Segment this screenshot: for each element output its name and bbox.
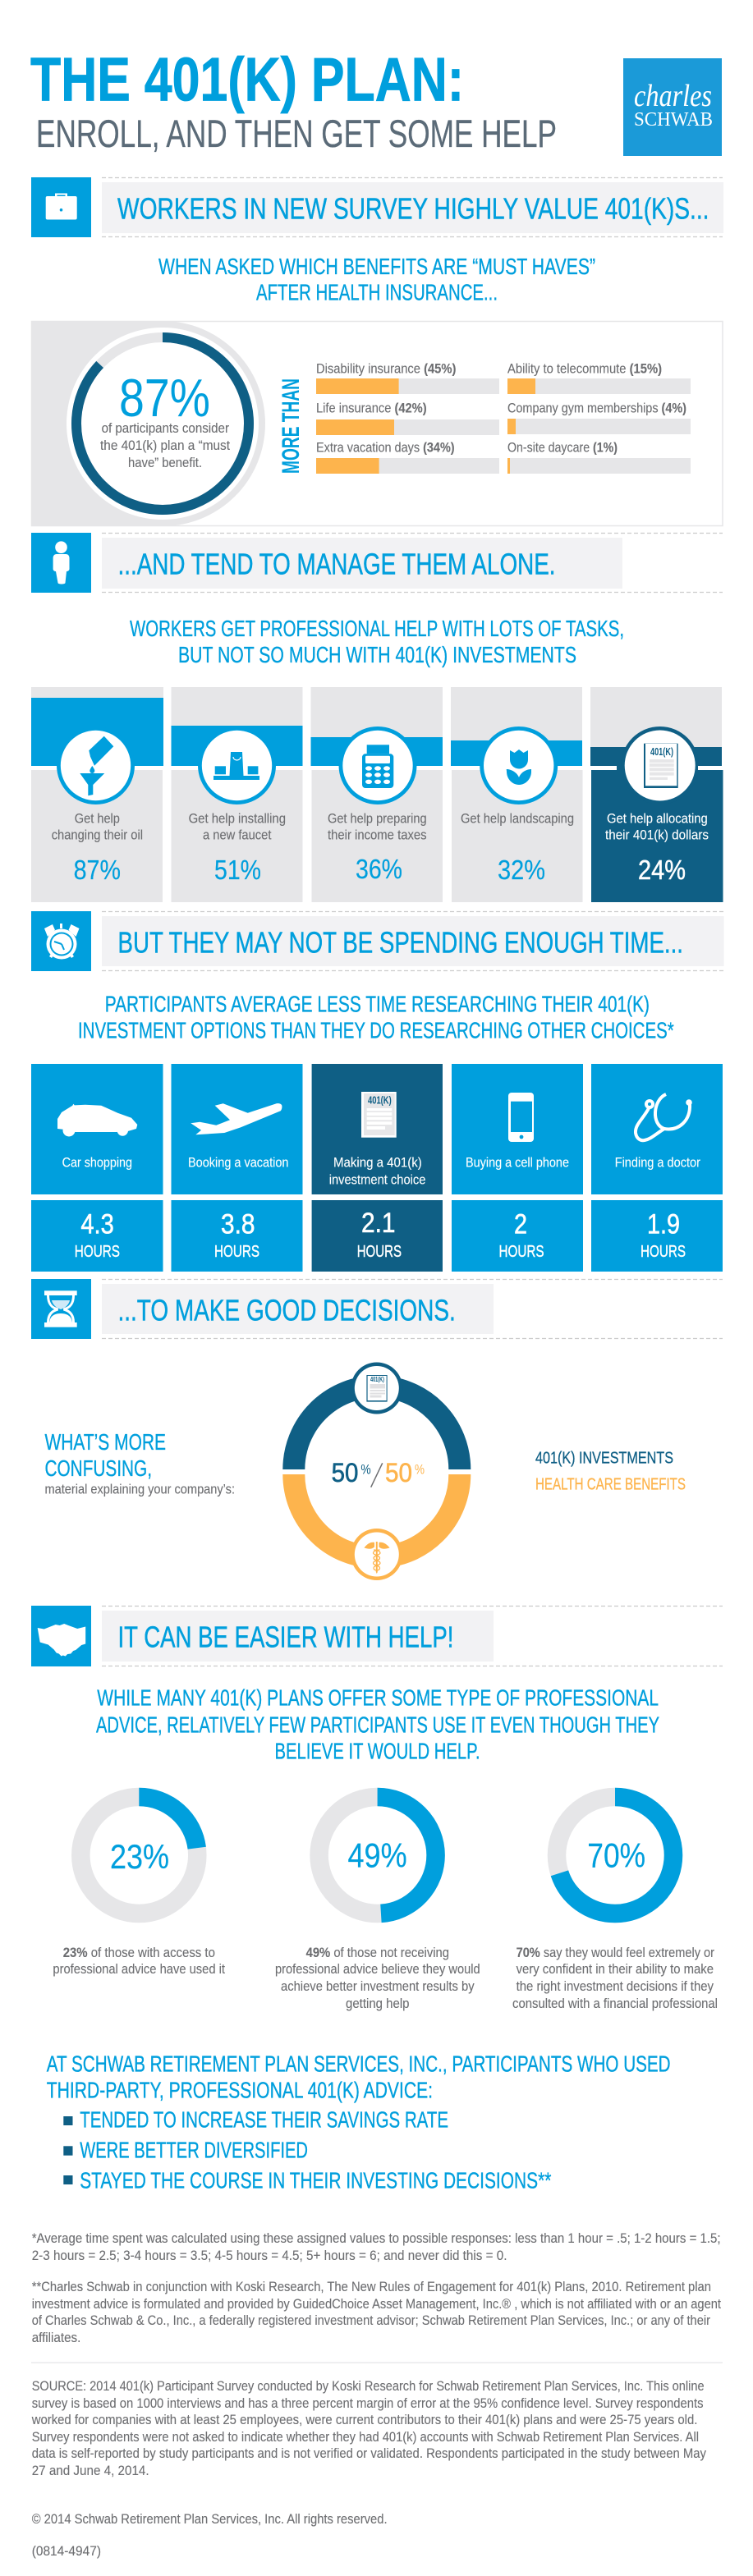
text: what's more confusing: material explaining your company’s: <box>44 1483 235 1497</box>
label: 50% / 50%: 50 <box>332 1458 358 1487</box>
heading: professional help <box>130 616 624 667</box>
panel: finding a doctor <box>591 1064 723 1272</box>
bar: extra vacation days: Extra vacation days (34%) <box>316 441 455 456</box>
section header: not enough time <box>31 911 724 971</box>
text: what's more confusing: WHAT’S MORE <box>44 1429 166 1455</box>
icon: 401(k) document <box>361 1092 397 1138</box>
icon: caduceus badge <box>351 1529 402 1580</box>
label: 50% / 50%: % <box>360 1462 371 1478</box>
donut chart: 49%: 49% <box>348 1836 407 1874</box>
text: copyright: © 2014 Schwab Retirement Plan Services, Inc. All rights reserved. <box>32 2512 388 2527</box>
footnote: Koski research: affiliates. <box>32 2331 80 2345</box>
logo: Charles Schwab: SCHWAB <box>634 109 713 131</box>
panel: oil change card: 87% <box>74 855 121 885</box>
legend: 401(K) INVESTMENTS <box>535 1450 673 1468</box>
text: 70% caption: very confident in their ability to make <box>517 1962 714 1977</box>
icon: 401(k) document <box>644 744 678 788</box>
donut chart: 50/50 <box>294 1363 460 1580</box>
subtitle: ENROLL, AND THEN GET SOME HELP <box>36 112 557 155</box>
bullet: savings rate: TENDED TO INCREASE THEIR SAVINGS RATE <box>80 2107 448 2133</box>
bar: telecommute: Ability to telecommute (15%) <box>507 362 662 377</box>
text: document code: (0814-4947) <box>32 2544 101 2559</box>
icon: alarm clock <box>44 924 79 959</box>
icon: hourglass <box>44 1290 77 1327</box>
section header: workers value 401(k)s <box>31 177 723 237</box>
heading: researching choices <box>78 992 674 1043</box>
icon: briefcase <box>46 194 77 220</box>
panel: finding a doctor: 1.9 <box>647 1209 680 1240</box>
panel: booking a vacation: HOURS <box>214 1243 259 1261</box>
panel: booking a vacation <box>171 1064 302 1272</box>
text: third-party advice results: THIRD-PARTY, PROFESSIONAL 401(K) ADVICE: <box>47 2078 433 2103</box>
text: 70% caption: the right investment decisions if they <box>517 1979 714 1994</box>
donut chart: 70% <box>557 1797 673 1914</box>
text: what's more confusing: CONFUSING, <box>44 1455 152 1481</box>
panel: finding a doctor: HOURS <box>641 1243 686 1261</box>
footnote: average time: 2-3 hours = 2.5; 3-4 hours = 3.5; 4-5 hours = 4.5; 5+ hours = 6; and never did this = 0. <box>32 2248 507 2263</box>
panel: car shopping: 4.3 <box>80 1209 114 1240</box>
panel: faucet card: a new faucet <box>203 828 272 843</box>
text: source: worked for companies with at least 25 employees, were current contributors to their 401(k) plans and were 25-75 years old. <box>31 2413 697 2427</box>
label: 50% / 50%: % <box>415 1462 425 1478</box>
section header: easier with help <box>31 1606 723 1666</box>
text: 23% caption: professional advice have used it <box>53 1962 225 1977</box>
panel: income taxes card: Get help preparing <box>328 811 427 826</box>
text: 23% caption <box>53 1946 225 1977</box>
panel: booking a vacation: Booking a vacation <box>188 1156 289 1171</box>
logo: Charles Schwab <box>623 58 722 156</box>
panel: oil change card: changing their oil <box>52 828 143 843</box>
bullet: stayed the course: STAYED THE COURSE IN THEIR INVESTING DECISIONS** <box>80 2168 551 2193</box>
icon: 401(k) document badge: 401(K) <box>370 1376 384 1383</box>
text: what's more confusing <box>44 1429 235 1497</box>
footnote: Koski research <box>32 2280 721 2345</box>
donut chart: 49% <box>319 1797 436 1914</box>
panel: landscaping card: 32% <box>498 855 545 885</box>
bar: on-site daycare <box>507 441 691 474</box>
text: 87% caption: have” benefit. <box>128 456 202 470</box>
bar: disability insurance <box>316 362 499 394</box>
bar: disability insurance: Disability insurance (45%) <box>316 362 456 377</box>
label: more than: MORE THAN <box>278 378 305 474</box>
text: 49% caption: getting help <box>346 1996 409 2011</box>
bullet: diversified <box>63 2138 308 2163</box>
icon: phone <box>508 1093 534 1142</box>
icon: airplane <box>191 1103 282 1134</box>
text: 87% caption <box>100 421 230 470</box>
panel: oil change card: Get help <box>75 811 120 826</box>
text: 23% caption: 23% of those with access to <box>63 1946 215 1960</box>
panel: 401(k) allocation card <box>590 687 723 902</box>
text: 49% caption: 49% of those not receiving <box>306 1946 449 1960</box>
panel: car shopping: Car shopping <box>62 1156 132 1171</box>
bar: life insurance <box>316 401 499 435</box>
legend: HEALTH CARE BENEFITS <box>535 1476 686 1494</box>
panel: buying a cell phone: 2 <box>514 1209 527 1240</box>
icon: 401(k) document: 401(K) <box>368 1093 392 1106</box>
heading: must haves: AFTER HEALTH INSURANCE... <box>256 280 498 305</box>
icon: oil and funnel <box>80 736 113 795</box>
panel: faucet card <box>171 687 302 902</box>
heading: professional advice <box>96 1684 659 1763</box>
panel: car shopping <box>31 1064 163 1272</box>
panel: 401(k) investment choice: 2.1 <box>361 1208 396 1239</box>
panel: income taxes card: their income taxes <box>328 828 427 843</box>
section header: good decisions: ...TO MAKE GOOD DECISIONS. <box>118 1294 456 1327</box>
section header: manage alone <box>31 533 723 593</box>
panel: 401(k) allocation card: Get help allocating <box>607 811 708 826</box>
title: THE 401(K) PLAN: <box>30 44 464 113</box>
panel: landscaping card: Get help landscaping <box>461 811 574 826</box>
bar: telecommute <box>507 362 691 394</box>
bullet: diversified: WERE BETTER DIVERSIFIED <box>80 2138 308 2163</box>
bar: life insurance: Life insurance (42%) <box>316 401 427 416</box>
panel: faucet card: Get help installing <box>189 811 286 826</box>
panel: 401(k) investment choice: HOURS <box>357 1243 402 1261</box>
big number: 87%: 87% <box>119 368 210 428</box>
donut chart: 23%: 23% <box>110 1837 169 1876</box>
panel: income taxes card: 36% <box>356 854 402 884</box>
heading: must haves <box>158 254 595 305</box>
donut chart: 23% <box>80 1797 197 1914</box>
donut chart: 70%: 70% <box>587 1836 645 1874</box>
icon: tulip <box>507 749 531 785</box>
icon: stethoscope <box>636 1094 691 1140</box>
panel: buying a cell phone: HOURS <box>499 1243 544 1261</box>
section header: easier with help: IT CAN BE EASIER WITH HELP! <box>118 1620 453 1654</box>
panel: income taxes card <box>310 687 443 902</box>
icon: car <box>57 1104 137 1136</box>
panel: landscaping card <box>451 687 583 902</box>
text: source: 27 and June 4, 2014. <box>32 2464 149 2478</box>
panel: car shopping: HOURS <box>75 1243 120 1261</box>
label: 50% / 50%: 50 <box>385 1458 412 1487</box>
bar: extra vacation days <box>316 441 499 474</box>
icon: faucet <box>214 752 259 780</box>
text: 70% caption: 70% say they would feel extremely or <box>517 1946 714 1960</box>
text: source <box>31 2379 707 2478</box>
panel: faucet card: 51% <box>214 855 261 885</box>
legend <box>535 1450 686 1494</box>
panel: oil change card <box>31 687 163 902</box>
section header: good decisions <box>31 1279 723 1339</box>
text: 70% caption: consulted with a financial professional <box>512 1996 718 2011</box>
section header: manage alone: ...AND TEND TO MANAGE THEM ALONE. <box>118 547 555 580</box>
panel: 401(k) investment choice: Making a 401(k) <box>333 1156 422 1171</box>
text: 87% caption: the 401(k) plan a “must <box>100 438 230 453</box>
footnote: average time <box>32 2231 721 2263</box>
panel: 401(k) allocation card: their 401(k) dollars <box>605 828 709 843</box>
text: third-party advice results <box>47 2051 671 2193</box>
panel: buying a cell phone: Buying a cell phone <box>466 1156 569 1171</box>
icon: person <box>53 541 69 584</box>
panel: 401(k) allocation card: 24% <box>638 855 686 885</box>
donut chart: 87% <box>76 337 249 510</box>
text: 49% caption: achieve better investment results by <box>281 1979 475 1994</box>
logo: Charles Schwab: charles <box>634 79 712 113</box>
bar: on-site daycare: On-site daycare (1%) <box>507 441 618 456</box>
icon: 401(k) document badge <box>351 1363 402 1414</box>
text: 49% caption: professional advice believe they would <box>275 1962 480 1977</box>
heading: must haves: WHEN ASKED WHICH BENEFITS ARE “MUST HAVES” <box>158 254 595 279</box>
panel: 401(k) investment choice <box>312 1064 443 1272</box>
text: 87% caption: of participants consider <box>102 421 229 436</box>
heading: professional advice: BELIEVE IT WOULD HELP. <box>274 1738 480 1763</box>
label: 50% / 50% <box>332 1458 425 1487</box>
panel: 401(k) investment choice: investment choice <box>329 1173 425 1188</box>
panel: buying a cell phone <box>452 1064 583 1272</box>
panel: booking a vacation: 3.8 <box>221 1209 255 1240</box>
heading: professional help: BUT NOT SO MUCH WITH 401(K) INVESTMENTS <box>178 642 576 667</box>
panel: benefits <box>31 321 723 526</box>
bar: gym memberships <box>507 401 691 434</box>
panel: finding a doctor: Finding a doctor <box>615 1156 700 1171</box>
bar: gym memberships: Company gym memberships (4%) <box>507 401 686 416</box>
icon: handshake <box>38 1624 85 1657</box>
icon: calculator <box>362 745 393 788</box>
text: 49% caption <box>275 1946 480 2011</box>
text: 70% caption <box>512 1946 718 2011</box>
icon: 401(k) document: 401(K) <box>650 745 673 758</box>
